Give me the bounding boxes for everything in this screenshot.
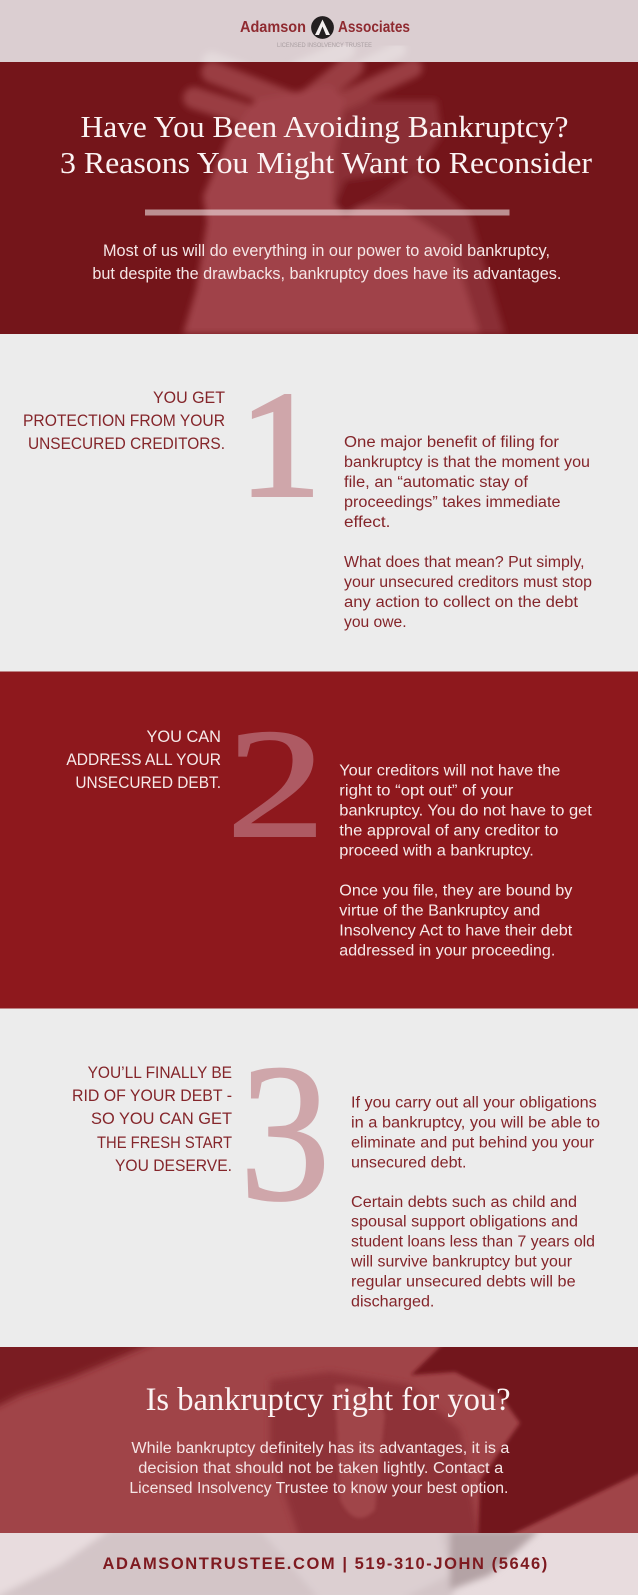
body text: reason 3: in a bankruptcy, you will be able to — [351, 1115, 600, 1132]
body text: reason 1: your unsecured creditors must stop — [344, 574, 592, 591]
body text: reason 3: unsecured debt. — [351, 1155, 466, 1172]
body text: reason 3: discharged. — [351, 1293, 434, 1310]
heading: reason 2: UNSECURED DEBT. — [75, 774, 221, 792]
panel: logo header band — [0, 0, 638, 62]
divider bar — [145, 210, 510, 216]
heading: reason 3: RID OF YOUR DEBT - — [72, 1087, 232, 1105]
heading: reason 1: PROTECTION FROM YOUR — [23, 412, 225, 430]
logo: Adamson Associates: Adamson — [240, 19, 306, 36]
closing heading: Is bankruptcy right for you? — [146, 1382, 511, 1418]
contact line: ADAMSONTRUSTEE.COM | 519-310-JOHN (5646) — [102, 1555, 547, 1573]
body text: reason 3: Certain debts such as child and — [351, 1194, 577, 1211]
panel: reason 3 — [0, 1008, 638, 1347]
logo: Adamson Associates — [240, 16, 410, 49]
numeral 1: 1 — [240, 361, 321, 528]
heading: reason 2 — [66, 728, 221, 792]
body text: reason 2: Once you file, they are bound by — [339, 882, 573, 899]
dark gap between hands — [335, 170, 410, 216]
panel: contact band — [0, 1530, 638, 1595]
body text: reason 1: bankruptcy is that the moment you — [344, 454, 590, 471]
body text: reason 3 — [350, 1095, 600, 1310]
title: Have You Been Avoiding Bankruptcy? — [80, 109, 568, 144]
intro text: Most of us will do everything in our power to avoid bankruptcy, — [103, 242, 550, 260]
body text: reason 2: Your creditors will not have the — [339, 762, 560, 779]
body text: reason 1: file, an “automatic stay of — [344, 474, 529, 491]
body text: reason 3: spousal support obligations and — [351, 1214, 578, 1230]
far hand, right — [330, 100, 505, 334]
title: 3 Reasons You Might Want to Reconsider — [60, 145, 593, 180]
body text: reason 2: virtue of the Bankruptcy and — [339, 902, 540, 919]
heading: reason 3: THE FRESH START — [97, 1134, 232, 1152]
heading: reason 1: UNSECURED CREDITORS. — [28, 435, 225, 453]
body text: reason 1: proceedings” takes immediate — [344, 494, 560, 511]
heading: reason 2: YOU CAN — [146, 728, 221, 746]
heading: reason 2: ADDRESS ALL YOUR — [66, 751, 221, 769]
body text: reason 3: student loans less than 7 years old — [351, 1233, 595, 1250]
heading: reason 1 — [23, 389, 225, 453]
body text: reason 1 — [344, 434, 592, 631]
closing text: While bankruptcy definitely has its advantages, it is a — [131, 1440, 510, 1457]
body text: reason 1: effect. — [344, 514, 390, 531]
closing text: decision that should not be taken lightly. Contact a — [138, 1460, 504, 1477]
panel: reason 2 — [0, 672, 638, 1008]
body text: reason 3: regular unsecured debts will be — [351, 1273, 576, 1290]
heading: reason 3: YOU’LL FINALLY BE — [88, 1064, 232, 1082]
body text: reason 1: What does that mean? Put simply, — [344, 554, 584, 571]
fingers behind — [194, 66, 413, 120]
body text: reason 2: bankruptcy. You do not have to get — [339, 802, 593, 819]
heading: reason 1: YOU GET — [153, 389, 225, 407]
intro text: but despite the drawbacks, bankruptcy does have its advantages. — [92, 265, 561, 283]
body text: reason 2: proceed with a bankruptcy. — [339, 842, 534, 859]
body text: reason 3: If you carry out all your obligations — [351, 1095, 597, 1112]
body text: reason 2 — [339, 762, 593, 959]
palm and arm — [183, 85, 480, 334]
numeral 3: 3 — [240, 1023, 330, 1242]
heading: reason 3 — [72, 1064, 232, 1175]
body text: reason 3: eliminate and put behind you your — [351, 1135, 594, 1152]
closing text: Licensed Insolvency Trustee to know your best option. — [129, 1480, 508, 1497]
body text: reason 1: any action to collect on the debt — [344, 594, 579, 611]
body text: reason 2: Insolvency Act to have their debt — [339, 922, 573, 939]
body text: reason 1: you owe. — [344, 614, 407, 631]
heading: reason 3: YOU DESERVE. — [115, 1157, 232, 1175]
icon: logo circle with chevron — [311, 16, 334, 39]
logo: Adamson Associates: Associates — [338, 19, 410, 36]
body text: reason 3: will survive bankruptcy but your — [350, 1253, 572, 1270]
heading: reason 3: SO YOU CAN GET — [91, 1110, 232, 1128]
title — [60, 109, 593, 180]
panel: reason 1 — [0, 334, 638, 671]
body text: reason 2: the approval of any creditor to — [339, 822, 558, 839]
body text: reason 1: One major benefit of filing for — [344, 434, 559, 451]
intro text — [92, 242, 561, 283]
panel: hero with hands photo — [0, 62, 638, 334]
numeral 2: 2 — [226, 697, 326, 870]
logo: Adamson Associates: LICENSED INSOLVENCY TRUSTEE — [277, 42, 372, 49]
panel: closing call to action with handshake photo — [0, 1340, 638, 1540]
closing text — [129, 1440, 510, 1497]
body text: reason 2: right to “opt out” of your — [339, 782, 513, 799]
body text: reason 2: addressed in your proceeding. — [339, 942, 555, 959]
